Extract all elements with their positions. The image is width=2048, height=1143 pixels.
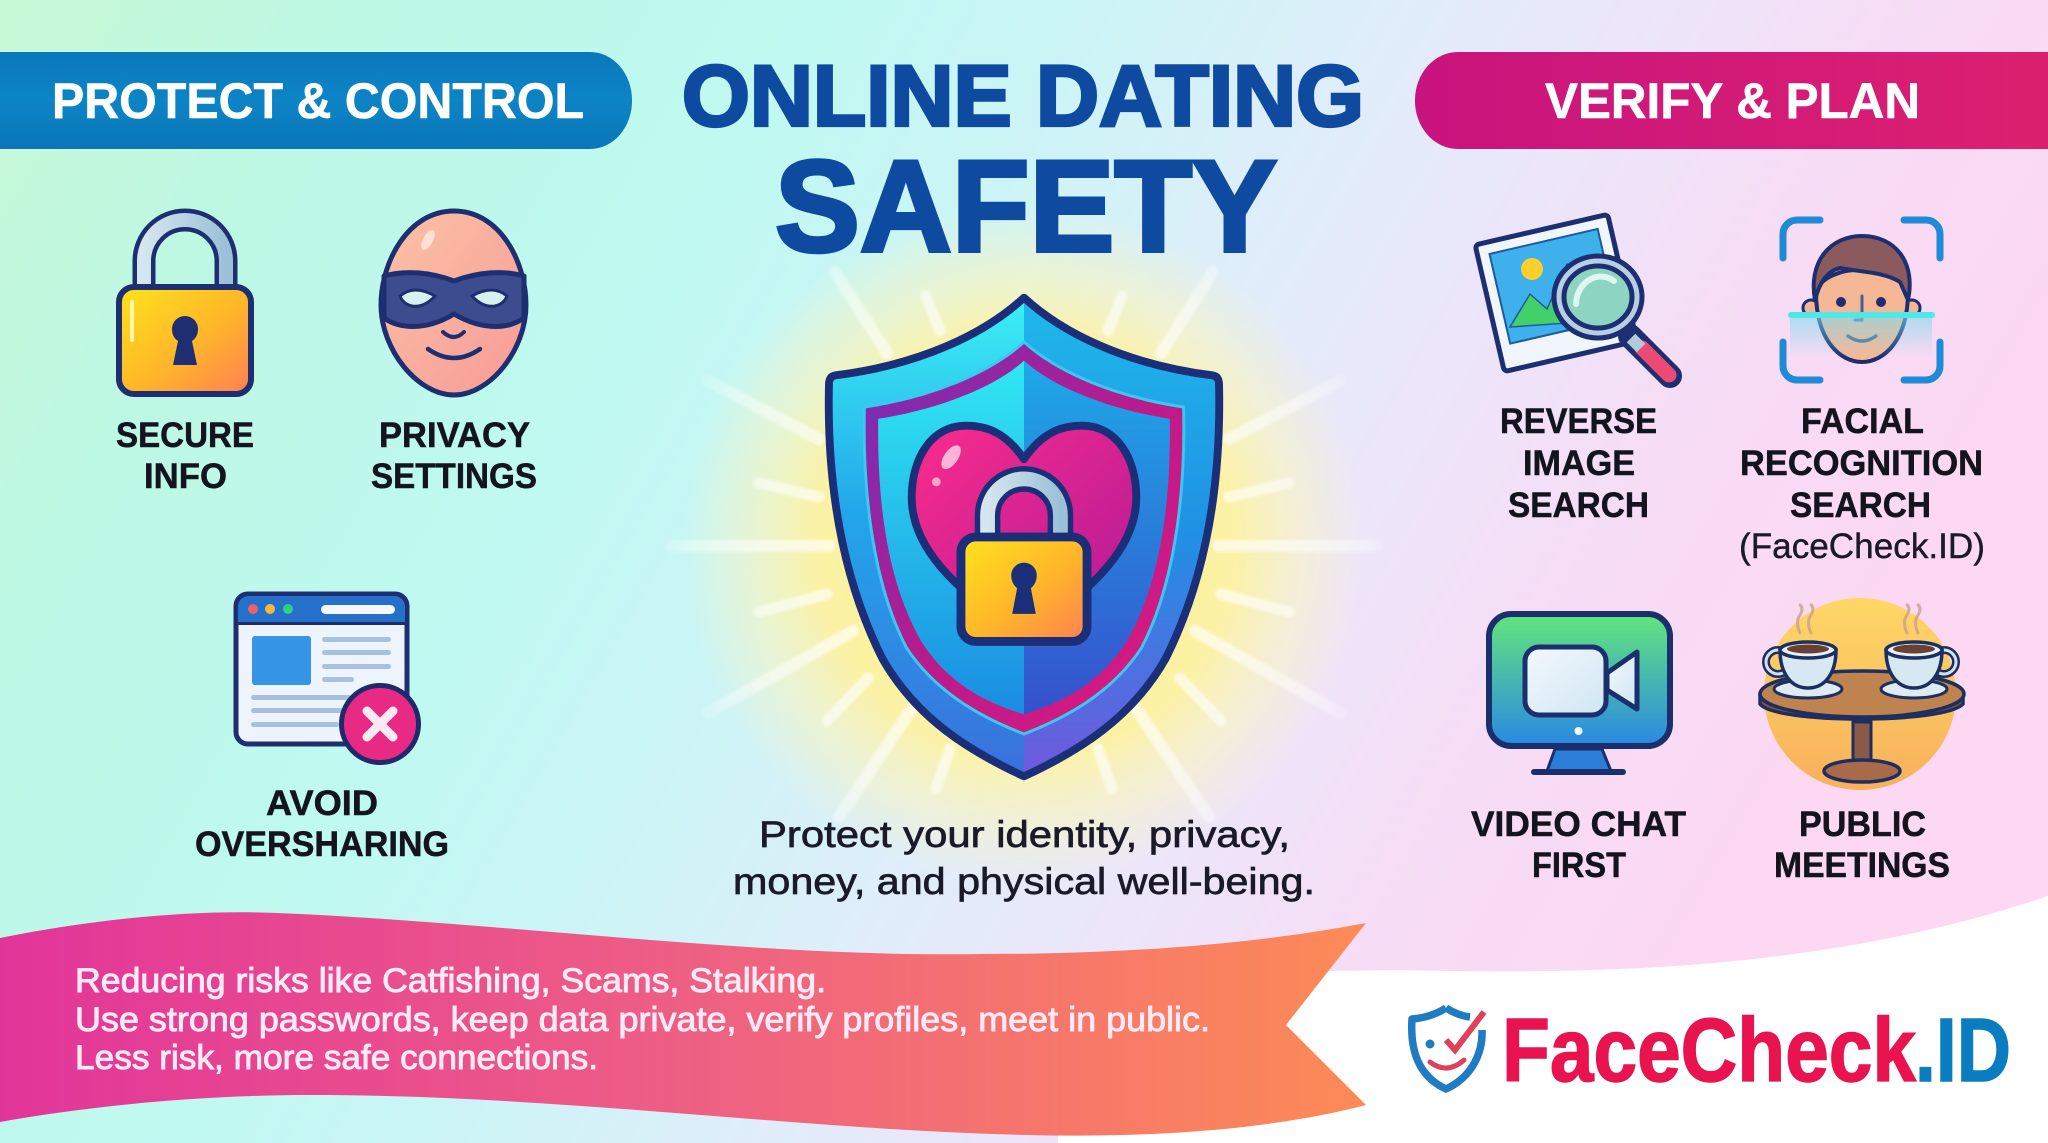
header bar: protect and control	[0, 52, 632, 149]
header bar: verify and plan	[1415, 52, 2048, 149]
label: facial recognition search facecheck.id: SEARCH	[1790, 486, 1931, 525]
label: reverse image search: IMAGE	[1523, 444, 1635, 483]
label: secure info	[116, 416, 254, 496]
icon: video chat monitor	[1489, 614, 1670, 775]
label: facial recognition search facecheck.id	[1739, 402, 1985, 566]
label: reverse image search: REVERSE	[1500, 402, 1657, 441]
white footer area	[1058, 896, 2048, 1143]
label: public meetings: MEETINGS	[1774, 846, 1950, 885]
label: facial recognition search facecheck.id: RECOGNITION	[1740, 444, 1983, 483]
header bar: verify and plan: VERIFY & PLAN	[1545, 73, 1920, 129]
ribbon banner: Use strong passwords, keep data private, verify profiles, meet in public.	[75, 1001, 1210, 1039]
label: privacy settings: PRIVACY	[379, 416, 530, 455]
tagline: money, and physical well-being.	[733, 861, 1315, 902]
label: facial recognition search facecheck.id: (FaceCheck.ID)	[1739, 527, 1985, 566]
icon: browser window with x	[236, 594, 418, 762]
icon: coffee table	[1760, 598, 1964, 790]
label: public meetings	[1774, 805, 1950, 885]
icon: facial recognition scan	[1783, 220, 1940, 380]
label: secure info: INFO	[144, 457, 227, 496]
label: privacy settings: SETTINGS	[371, 457, 537, 496]
icon: padlock	[119, 220, 251, 394]
label: avoid oversharing	[195, 784, 449, 864]
logo: facecheck.id: .ID	[1915, 1001, 2011, 1101]
header bar: protect and control: PROTECT & CONTROL	[52, 73, 584, 129]
logo shield mark	[1412, 1008, 1484, 1089]
tagline: Protect your identity, privacy,	[759, 814, 1290, 855]
label: reverse image search: SEARCH	[1508, 486, 1649, 525]
tagline	[733, 814, 1315, 902]
label: privacy settings	[371, 416, 537, 496]
ribbon banner	[0, 912, 1366, 1136]
label: video chat first: FIRST	[1532, 846, 1626, 885]
label: avoid oversharing: AVOID	[266, 784, 378, 823]
ribbon banner: Reducing risks like Catfishing, Scams, Stalking.	[75, 962, 826, 1000]
logo: facecheck.id: FaceCheck	[1502, 1001, 1917, 1101]
label: video chat first	[1471, 805, 1686, 885]
label: facial recognition search facecheck.id: FACIAL	[1801, 402, 1924, 441]
icon: masked face	[381, 211, 526, 395]
icon: shield with heart and lock	[829, 298, 1219, 776]
label: secure info: SECURE	[116, 416, 254, 455]
icon: reverse image search	[1475, 214, 1670, 376]
title: ONLINE DATING	[682, 48, 1364, 144]
shield glow and rays	[672, 206, 1376, 886]
title: SAFETY	[775, 133, 1277, 279]
label: public meetings: PUBLIC	[1799, 805, 1926, 844]
label: avoid oversharing: OVERSHARING	[195, 825, 449, 864]
title	[682, 48, 1364, 279]
label: video chat first: VIDEO CHAT	[1471, 805, 1686, 844]
ribbon banner: Less risk, more safe connections.	[75, 1039, 598, 1077]
label: reverse image search	[1500, 402, 1657, 525]
